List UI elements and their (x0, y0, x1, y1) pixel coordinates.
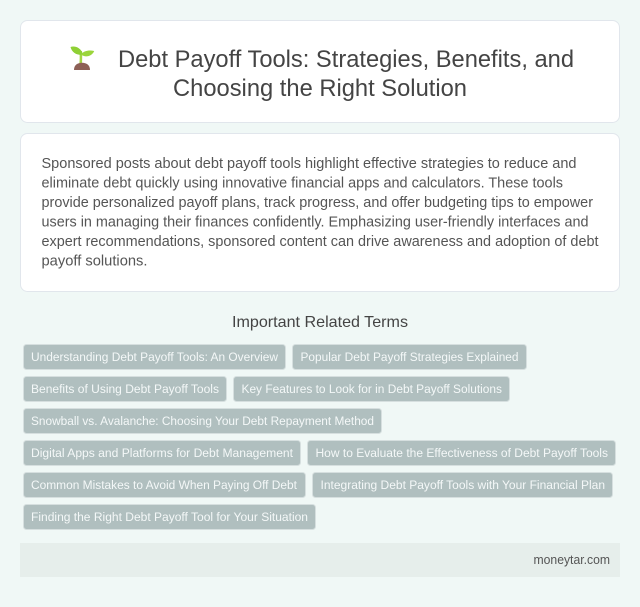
tag: Finding the Right Debt Payoff Tool for Your Situation (31, 510, 308, 524)
tag (24, 504, 316, 530)
summary text (42, 156, 598, 270)
tag (312, 472, 612, 498)
tag (308, 440, 616, 466)
panel: summary paragraph (20, 134, 620, 292)
tag (24, 472, 306, 498)
summary text: users in managing their finances confidently. Emphasizing user-friendly interfaces and (42, 214, 588, 230)
heading: important related terms: Important Related Terms (232, 314, 408, 331)
tag (234, 376, 510, 402)
tag: How to Evaluate the Effectiveness of Debt Payoff Tools (316, 446, 608, 460)
summary text: payoff solutions. (42, 254, 148, 270)
title text: Choosing the Right Solution (173, 75, 467, 102)
tag: Integrating Debt Payoff Tools with Your Financial Plan (320, 478, 605, 492)
tag: Snowball vs. Avalanche: Choosing Your Debt Repayment Method (31, 414, 374, 428)
summary text: provide personalized payoff plans, track progress, and offer budgeting tips to empower (42, 195, 593, 211)
tag: Common Mistakes to Avoid When Paying Off Debt (31, 478, 298, 492)
title text (118, 46, 574, 102)
tag (24, 408, 382, 434)
tag (24, 344, 286, 370)
footer bar (20, 543, 620, 577)
summary text: eliminate debt quickly using innovative financial apps and calculators. These tools (42, 176, 563, 192)
title text: Debt Payoff Tools: Strategies, Benefits, and (118, 46, 574, 73)
tag: Digital Apps and Platforms for Debt Management (31, 446, 294, 460)
tag: Understanding Debt Payoff Tools: An Overview (31, 350, 278, 364)
tag (292, 344, 526, 370)
tag: Popular Debt Payoff Strategies Explained (300, 350, 518, 364)
title panel (20, 20, 620, 122)
icon: sprout (70, 47, 94, 70)
tag: Key Features to Look for in Debt Payoff Solutions (242, 382, 502, 396)
tag list (24, 344, 616, 530)
summary text: Sponsored posts about debt payoff tools highlight effective strategies to reduce and (42, 156, 576, 172)
summary text: expert recommendations, sponsored content can drive awareness and adoption of debt (42, 234, 598, 250)
tag: Benefits of Using Debt Payoff Tools (31, 382, 219, 396)
tag (24, 440, 300, 466)
footer source text: moneytar.com (534, 552, 610, 567)
tag (24, 376, 226, 402)
